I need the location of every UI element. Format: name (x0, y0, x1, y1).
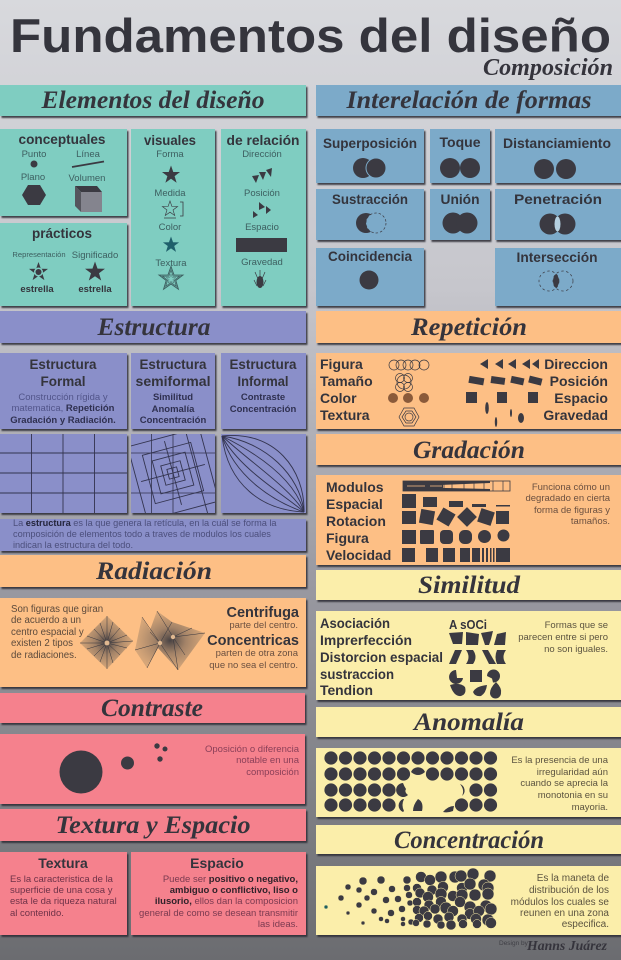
labels: Espacio (245, 222, 279, 233)
panel: coincidencia (316, 248, 424, 306)
description: módulos los cuales se (511, 897, 609, 908)
icon: star representation (29, 262, 48, 280)
panel: elementos del diseño header (0, 85, 306, 116)
chart: rotation gradient (402, 507, 509, 527)
labels left: Textura (320, 407, 370, 423)
panel: similitud header (316, 570, 621, 600)
labels: Significado (72, 250, 118, 261)
description: ambiguo o conflictivo, liso o (170, 885, 298, 896)
panel: radiación (0, 598, 306, 687)
credit: Hanns Juárez (526, 938, 608, 953)
chart: semiformal grid (131, 434, 218, 516)
description: Contraste (241, 392, 285, 403)
description (511, 873, 609, 930)
description: Formas que se (545, 620, 608, 631)
panel: unión (430, 189, 490, 240)
heading: semiformal (136, 373, 210, 389)
labels: Asociación (320, 615, 390, 631)
labels: Medida (154, 188, 186, 199)
description: notable en una (236, 755, 300, 766)
panel: concentración (316, 866, 621, 935)
description: no son iguales. (544, 644, 608, 655)
labels (241, 149, 283, 268)
labels (21, 149, 105, 184)
icon: star size (162, 201, 183, 218)
description: matematica, Repetición (12, 403, 115, 414)
labels (320, 615, 443, 698)
credit: Design by (499, 940, 529, 947)
description: parten de otra zona (216, 648, 299, 659)
panel: radiación header (0, 555, 306, 587)
icon: size circles (396, 374, 412, 392)
labels: Representación (12, 250, 66, 259)
panel: contraste (0, 734, 305, 804)
labels: estrella: estrella (78, 284, 112, 295)
heading: Estructura (30, 356, 97, 372)
icon (539, 271, 573, 291)
labels: Figura (326, 530, 369, 546)
chart: velocity gradient (402, 548, 510, 562)
labels left: Figura (320, 356, 363, 372)
description: superficie de una cosa y (10, 885, 113, 896)
chart: concentration dots (324, 868, 497, 930)
panel: estructura header (0, 311, 306, 343)
heading: Elementos del diseño (40, 87, 264, 114)
icon: tension shapes (450, 682, 501, 698)
description: composición de elementos todo a traves de modulos los cuales (13, 529, 271, 539)
description: cuando se aprecia la (520, 778, 609, 789)
icon: direction triangles (480, 359, 539, 369)
heading: Informal (238, 373, 288, 389)
labels: Color (159, 222, 181, 233)
description (10, 874, 117, 919)
description: Concentración (140, 415, 206, 426)
chart: concentric radiation (135, 611, 205, 670)
description: las ideas. (258, 919, 298, 930)
icon (540, 214, 576, 234)
description: Oposición o diferencia (205, 744, 300, 755)
panel: estructura informal (221, 353, 306, 429)
heading: Coincidencia (328, 248, 412, 264)
labels (154, 149, 187, 269)
icon: línea (72, 162, 104, 167)
heading: prácticos (32, 225, 92, 241)
description: monotonia en su (538, 790, 608, 801)
labels: Volumen (69, 173, 105, 184)
heading: Textura (38, 855, 88, 871)
heading: Distanciamiento (503, 135, 611, 151)
description: Gradación y Radiación. (10, 415, 116, 426)
description: Funciona cómo un (532, 482, 610, 493)
icon: gravity (254, 270, 266, 288)
description: composición (246, 767, 299, 778)
description: degradado en cierta (525, 493, 611, 504)
labels: Dirección (242, 149, 282, 160)
panel: conceptuales (0, 129, 127, 216)
description (209, 648, 299, 671)
panel: gradación header (316, 434, 621, 465)
panel: intersección (495, 248, 621, 306)
icon (356, 213, 386, 233)
labels left (320, 356, 373, 423)
chart: anomaly dots (324, 751, 497, 812)
icon (353, 158, 386, 178)
description: Concentración (230, 404, 296, 415)
description: al contenido. (10, 908, 64, 919)
description: existen 2 tipos (11, 638, 73, 649)
labels (12, 250, 118, 261)
labels: Plano (21, 172, 45, 183)
description: Puede ser positivo o negativo, (163, 874, 298, 885)
labels: Velocidad (326, 547, 391, 563)
icon (442, 212, 478, 234)
icon: star meaning (85, 262, 105, 281)
description (525, 482, 611, 527)
icon (534, 159, 576, 179)
labels: Tendion (320, 682, 373, 698)
icon: plano hexagon (22, 185, 46, 205)
heading: Toque (440, 134, 481, 150)
icon: colour dots (388, 393, 429, 403)
icon: space bar (236, 238, 287, 252)
heading: Similitud (418, 572, 521, 599)
panel: estructura text (0, 518, 306, 551)
labels: estrella: estrella (20, 284, 54, 295)
description: distribución de los (529, 885, 609, 896)
heading: Contraste (101, 695, 203, 722)
labels: Rotacion (326, 513, 386, 529)
panel: contraste header (0, 693, 305, 723)
chart: informal curves (221, 434, 306, 513)
heading: Estructura (140, 356, 207, 372)
chart: figure gradient (402, 530, 510, 544)
description: especifica. (562, 919, 609, 930)
heading: Espacio (190, 855, 244, 871)
heading (30, 356, 97, 389)
icon: subtraction shapes (449, 670, 500, 684)
heading: Superposición (323, 135, 417, 151)
labels left: Tamaño (320, 373, 373, 389)
description: Anomalía (152, 404, 195, 415)
panel: sustracción (316, 189, 424, 240)
heading: Penetración (514, 191, 602, 207)
description: Es la presencia de una (511, 755, 609, 766)
panel: distanciamiento (495, 129, 621, 183)
icon: position arrows (253, 202, 271, 218)
labels: Distorcion espacial (320, 649, 443, 665)
description: indican la estructura del todo. (13, 540, 133, 550)
panel: gradación (316, 475, 621, 565)
description: mayoria. (572, 802, 608, 813)
icon: punto (30, 160, 38, 168)
icon: position bars (468, 376, 543, 386)
chart: spatial gradient (402, 494, 510, 508)
heading: Intersección (516, 249, 598, 265)
description: reunen en una zona (520, 908, 609, 919)
description: La estructura es la que genera la retícula, en la cuál se forma la (13, 518, 277, 528)
panel: estructura semiformal (131, 353, 215, 429)
description (518, 620, 608, 655)
icon: space squares (466, 392, 538, 403)
heading: Anomalía (412, 709, 524, 736)
heading: Textura y Espacio (56, 812, 251, 839)
panel: textura (0, 852, 127, 935)
heading: Formal (40, 373, 86, 389)
panel: anomalía header (316, 707, 621, 737)
labels: Punto (22, 149, 46, 160)
subtitle: Composición (483, 55, 613, 81)
heading: de relación (226, 132, 300, 148)
icon: rings (389, 360, 429, 370)
description: forma de figuras y (534, 505, 610, 516)
labels right: Posición (550, 373, 608, 389)
labels: Imprerfección (320, 632, 412, 648)
heading: Gradación (413, 437, 525, 464)
labels: Gravedad (241, 257, 283, 268)
description (11, 604, 103, 661)
heading (230, 356, 297, 389)
description: tamaños. (571, 516, 610, 527)
panel: visuales (131, 129, 215, 306)
chart: modules bar (403, 481, 510, 491)
icon: direction arrows (252, 168, 272, 183)
heading: Repetición (410, 314, 527, 341)
icon (440, 158, 480, 178)
chart: centrifugal radiation (80, 616, 133, 669)
description (511, 755, 609, 813)
panel: de relación (221, 129, 306, 306)
label: centrifuga: Centrifuga (226, 605, 300, 621)
heading: Radiación (95, 558, 212, 585)
description: que no sea el centro. (209, 660, 298, 671)
heading: conceptuales (18, 131, 106, 147)
labels: Textura (155, 258, 187, 269)
heading: Interelación de formas (345, 87, 592, 114)
heading: Estructura (96, 314, 210, 341)
icon: star texture (159, 266, 183, 289)
description (140, 392, 206, 426)
panel: anomalía (316, 748, 621, 817)
labels right: Direccion (544, 356, 608, 372)
description (205, 744, 300, 778)
description (13, 518, 277, 550)
description (139, 874, 298, 930)
description (10, 392, 116, 426)
panel: repetición header (316, 311, 621, 343)
icon: star colour (163, 236, 179, 252)
description: Construcción rígida y (18, 392, 108, 403)
description: general de como se desean transmitir (139, 908, 298, 919)
icon: imperfection shapes (449, 631, 506, 645)
labels: Posición (244, 188, 280, 199)
description: parte del centro. (229, 620, 298, 631)
description: Son figuras que giran (11, 604, 103, 615)
description: ilusorio, ellos dan la composicion (155, 896, 298, 907)
heading: Unión (440, 191, 480, 207)
heading: Sustracción (332, 191, 408, 207)
labels: Modulos (326, 479, 384, 495)
labels right (543, 356, 608, 423)
description: Es la maneta de (537, 873, 609, 884)
description: de radiaciones. (11, 650, 77, 661)
panel: superposición (316, 129, 424, 183)
panel: espacio (131, 852, 306, 935)
icon: star form (162, 166, 180, 183)
description: Es la caracteristica de la (10, 874, 114, 885)
panel: prácticos (0, 223, 127, 306)
panel: toque (430, 129, 490, 183)
panel: interelación de formas header (316, 85, 621, 116)
panel: estructura formal (0, 353, 127, 429)
description: Similitud (153, 392, 193, 403)
labels left: Color (320, 390, 357, 406)
panel: penetración (495, 189, 621, 240)
heading: visuales (144, 132, 196, 148)
description: de acuerdo a un (11, 615, 81, 626)
panel: similitud (316, 611, 621, 700)
labels: Línea (76, 149, 101, 160)
panel: textura y espacio header (0, 809, 306, 841)
heading (136, 356, 210, 389)
icon: gravity ellipses (485, 402, 524, 427)
heading: Estructura (230, 356, 297, 372)
icon (360, 270, 378, 290)
panel: repetición (316, 353, 621, 429)
title: Fundamentos del diseño (10, 9, 611, 62)
description: centro espacial y (11, 627, 84, 638)
label: concentricas: Concentricas (207, 633, 299, 649)
icon: association letters: A sOCi (449, 617, 487, 632)
chart: formal grid (0, 434, 127, 513)
description: parecen entre si pero (518, 632, 608, 643)
panel: concentración header (316, 825, 621, 854)
chart: contrast circles (60, 743, 168, 794)
description: esta le da riqueza natural (10, 896, 117, 907)
labels right: Espacio (554, 390, 608, 406)
labels (326, 479, 391, 563)
labels right: Gravedad (543, 407, 608, 423)
icon: texture hexagon (399, 408, 419, 426)
icon: volumen cube (75, 186, 102, 212)
description: irregularidad aún (537, 767, 608, 778)
labels: Forma (156, 149, 184, 160)
description (230, 392, 296, 415)
icon: distortion shapes (449, 650, 506, 664)
labels: estrella (20, 284, 112, 295)
heading: Concentración (394, 827, 544, 854)
labels: Espacial (326, 496, 383, 512)
labels: sustraccion (320, 666, 394, 682)
